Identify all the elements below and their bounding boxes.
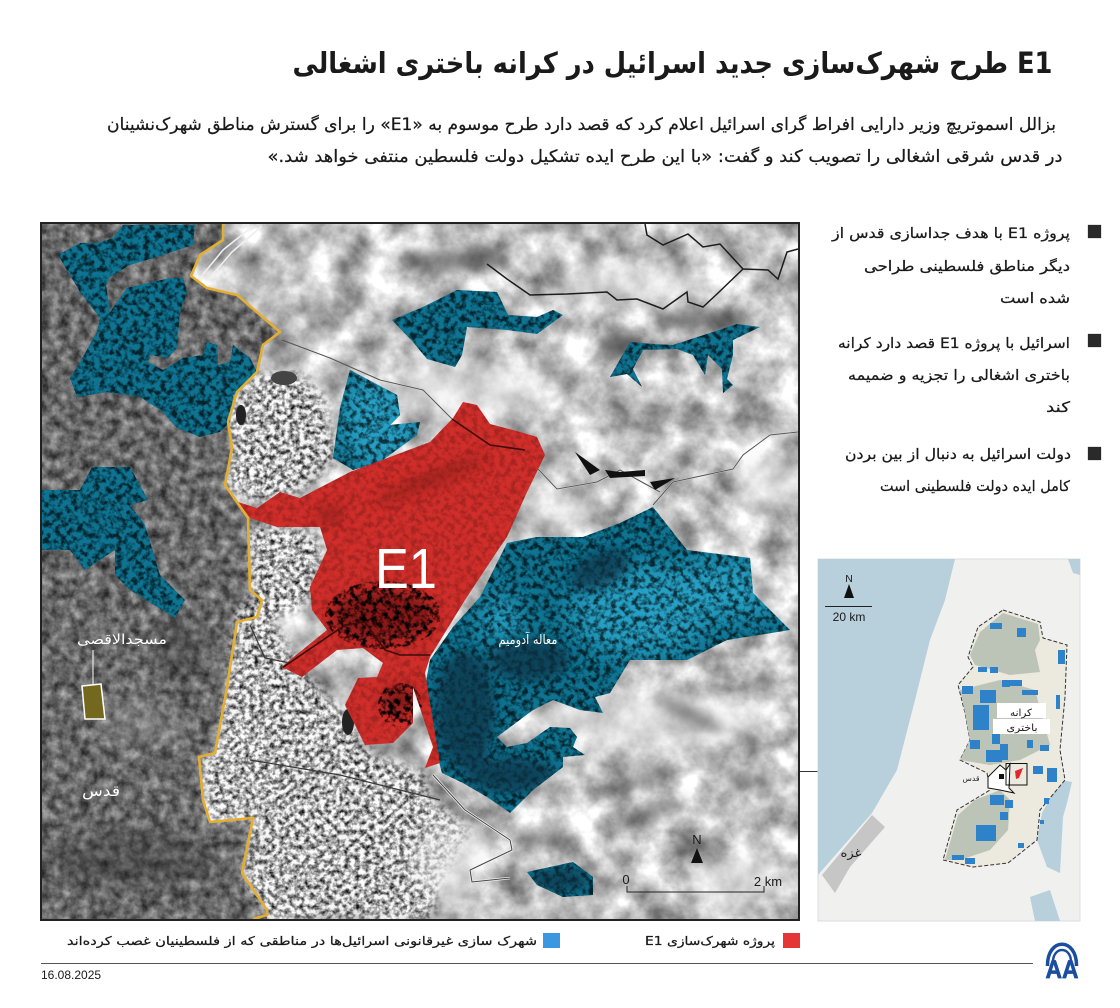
Jerusalem and E1 locator xyxy=(988,764,1027,793)
inset scale xyxy=(825,606,872,624)
bullet 3: کامل ایده دولت فلسطینی است xyxy=(880,479,1070,495)
title: E1 طرح شهرک‌سازی جدید اسرائیل در کرانه باختری اشغالی xyxy=(292,46,1052,80)
logo: AA xyxy=(1046,944,1078,984)
sea xyxy=(818,559,1080,875)
bullet 1: شده است xyxy=(1000,291,1070,307)
bullet 2: باختری اشغالی را تجزیه و ضمیمه xyxy=(848,368,1070,384)
E1 label: E1 xyxy=(375,537,437,601)
roads and wadis xyxy=(200,224,798,882)
label: Gaza: غزه xyxy=(840,846,862,861)
municipal border xyxy=(191,222,280,919)
label: Jerusalem: قدس xyxy=(962,774,980,783)
legend: settlements xyxy=(67,933,560,949)
dark shadows xyxy=(575,452,675,490)
scale bar: 2 km xyxy=(754,874,782,889)
Maale Adumim label: معاله آدومیم xyxy=(498,631,558,648)
intro text: بزالل اسموتریچ وزیر دارایی افراط گرای اسرائیل اعلام کرد که قصد دارد طرح موسوم به «E1» را برای گسترش مناطق شهرک‌نشینان xyxy=(107,114,1056,135)
settlement patches xyxy=(952,623,1065,864)
E1 area xyxy=(230,395,555,775)
bullet 3 xyxy=(845,447,1101,495)
legend: E1: پروژه شهرک‌سازی E1 xyxy=(645,934,775,949)
inset scale: 20 km xyxy=(833,610,865,624)
logo: AA: AA xyxy=(1046,956,1078,984)
Al-Aqsa label and marker: مسجدالاقصی xyxy=(77,632,167,648)
bullet 1: دیگر مناطق فلسطینی طراحی xyxy=(864,258,1070,275)
label: West Bank: باختری xyxy=(1006,723,1038,734)
bullet 1 xyxy=(831,225,1101,307)
Al-Aqsa label and marker xyxy=(77,632,167,719)
bullet 2 xyxy=(838,334,1101,416)
bullet list xyxy=(831,225,1101,495)
West Bank xyxy=(943,610,1067,867)
light terrain xyxy=(390,265,805,905)
bullet 1: پروژه E1 با هدف جداسازی قدس از xyxy=(831,226,1070,242)
scale bar xyxy=(622,872,782,892)
north arrow xyxy=(691,832,703,863)
date: 16.08.2025 xyxy=(41,968,101,982)
scale bar: 0 xyxy=(622,872,630,887)
connector line xyxy=(800,770,1006,772)
bullet 2: اسرائیل با پروژه E1 قصد دارد کرانه xyxy=(838,336,1070,352)
legend: E1 xyxy=(645,933,800,949)
inset north arrow xyxy=(844,573,854,598)
settlements xyxy=(41,223,799,920)
intro text xyxy=(107,114,1063,167)
bullet 2: کند xyxy=(1046,400,1070,416)
dark ridges xyxy=(400,249,775,850)
bullet 3: دولت اسرائیل به دنبال از بین بردن xyxy=(845,447,1071,463)
panel: satellite map xyxy=(41,222,805,920)
label: West Bank xyxy=(993,703,1050,734)
north arrow: N xyxy=(692,832,702,847)
intro text: در قدس شرقی اشغالی را تصویب کند و گفت: «با این طرح ایده تشکیل دولت فلسطین منتفی خواهد شد.» xyxy=(268,146,1062,167)
legend: settlements: شهرک سازی غیرقانونی اسرائیل‌ها در مناطقی که از فلسطینیان غصب کرده‌اند xyxy=(67,934,537,949)
inset north arrow: N xyxy=(845,573,853,585)
inset locator map xyxy=(818,559,1080,921)
Dead Sea xyxy=(1030,780,1072,921)
Gaza xyxy=(822,815,885,893)
label: West Bank: کرانه xyxy=(1010,708,1032,719)
Jerusalem label: قدس xyxy=(82,782,120,800)
